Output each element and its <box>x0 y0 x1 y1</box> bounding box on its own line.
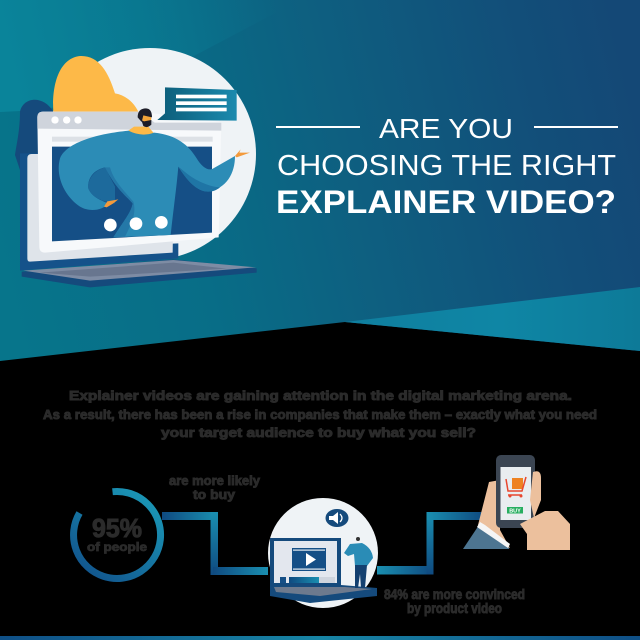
cart icon <box>506 477 526 498</box>
connector: video to phone <box>377 512 483 574</box>
presenter right hand <box>235 149 250 157</box>
backdrop circle <box>44 48 256 260</box>
standing man <box>344 537 373 588</box>
pointing hand <box>520 511 570 550</box>
title <box>276 113 618 220</box>
gripping fingers <box>530 471 541 518</box>
connector: ring to video <box>162 512 268 575</box>
shirt cuff <box>477 522 510 548</box>
title line 3: EXPLAINER VIDEO? <box>276 184 616 220</box>
title rule right <box>534 126 618 128</box>
browser title bar <box>37 112 221 131</box>
illustration: presenter emerging from laptop <box>15 48 257 287</box>
title line 2: CHOOSING THE RIGHT <box>277 150 616 182</box>
intro paragraph: Explainer videos are gaining attention in the digital marketing arena. <box>69 388 572 403</box>
presenter hair <box>138 108 152 122</box>
ring label: 95% <box>92 513 142 543</box>
video screen <box>52 147 212 241</box>
label: 84% convinced: by product video <box>407 600 502 616</box>
video illustration <box>268 498 378 608</box>
phone screen <box>500 467 531 520</box>
address bar <box>52 137 213 142</box>
rear window <box>27 154 174 262</box>
intro paragraph: your target audience to buy what you sell? <box>161 425 476 440</box>
arm shadow <box>88 167 115 203</box>
progress ring: 95% <box>74 491 161 578</box>
label: more likely to buy <box>169 473 261 502</box>
yellow hair shape <box>53 56 138 112</box>
sleeve <box>463 525 509 549</box>
bottom strip <box>0 636 640 640</box>
phone body <box>496 455 535 528</box>
label: 84% convinced: 84% are more convinced <box>384 586 525 602</box>
intro paragraph <box>43 388 597 440</box>
header background <box>0 0 640 361</box>
play icon <box>306 553 316 566</box>
intro paragraph: As a result, there has been a rise in companies that make them – exactly what you need <box>43 407 597 422</box>
laptop base <box>22 259 257 287</box>
hand holding phone illustration <box>463 455 570 550</box>
presenter left hand <box>104 199 118 207</box>
laptop lid <box>270 538 341 585</box>
white pager dots <box>104 216 168 231</box>
title line 1: ARE YOU <box>379 113 513 144</box>
ring sublabel: of people <box>87 540 147 554</box>
label: more likely to buy: to buy <box>193 487 236 502</box>
progress bar <box>280 577 286 583</box>
label: 84% convinced <box>384 586 525 616</box>
holding hand <box>478 480 510 548</box>
speaker icon <box>326 509 348 527</box>
buy button: BUY <box>509 508 521 514</box>
label: more likely to buy: are more likely <box>169 473 261 488</box>
title rule left <box>276 126 360 128</box>
sleeve shade <box>178 167 220 192</box>
film strip <box>292 548 326 571</box>
presenter face <box>142 113 151 124</box>
presenter beard <box>141 120 151 127</box>
laptop screen <box>274 541 337 583</box>
bubble text lines <box>176 95 227 111</box>
torso shade <box>105 167 134 237</box>
speech bubble <box>157 87 237 121</box>
browser window <box>37 112 221 253</box>
presenter neck <box>128 127 154 136</box>
presenter body <box>59 131 235 237</box>
laptop base <box>270 585 377 603</box>
circle backdrop <box>268 498 378 608</box>
browser dots <box>51 116 82 124</box>
laptop back panel <box>20 153 178 271</box>
navy plant shape <box>15 100 53 170</box>
